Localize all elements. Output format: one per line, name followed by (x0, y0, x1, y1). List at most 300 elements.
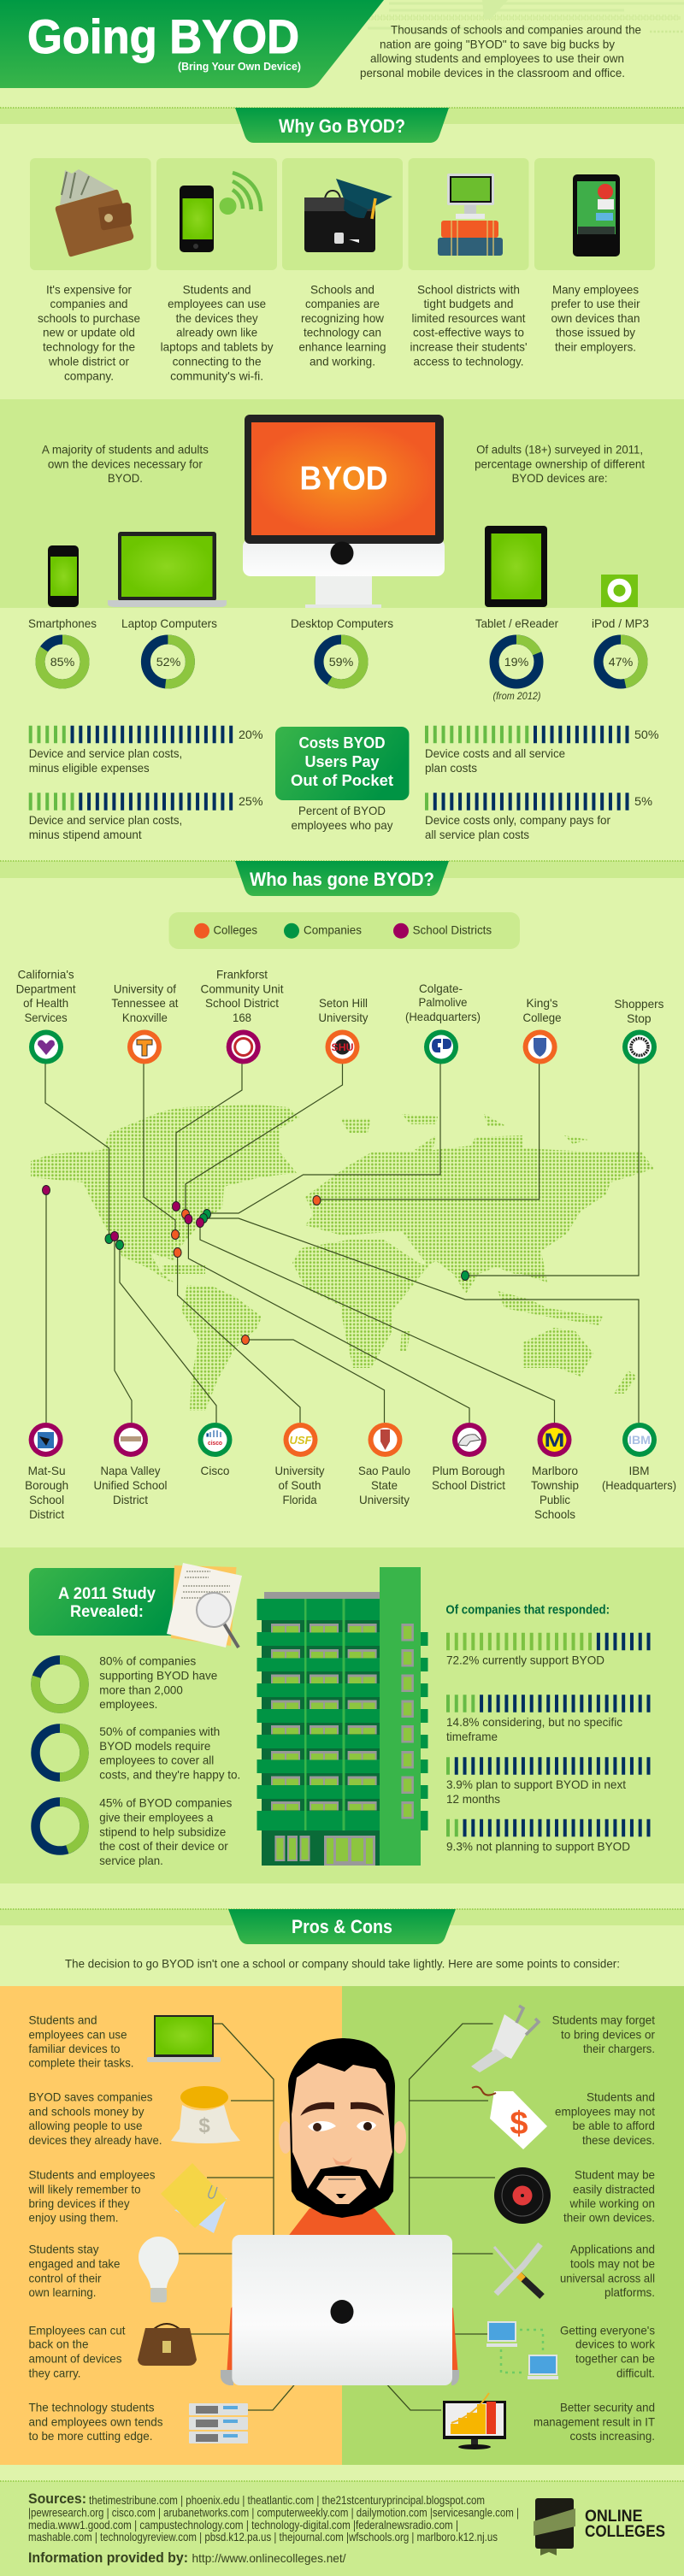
section band: who (0, 861, 684, 878)
icon: tools (494, 2244, 542, 2296)
top org: Tennessee: Knoxville (122, 1011, 168, 1024)
device labels (28, 616, 649, 630)
why text: devices: connecting to the (173, 354, 262, 368)
icon: chart monitor (443, 2393, 506, 2449)
callout: out of pocket: employees who pay (291, 818, 393, 832)
device text right: BYOD devices are: (512, 471, 608, 485)
donut chart: 50% (36, 1729, 84, 1777)
bar: 14.8%: 14.8% considering, but no specific (446, 1715, 622, 1729)
icon: sticky notes (161, 2163, 227, 2233)
why text: budgets: School districts with (417, 282, 520, 296)
study text: 45%: stipend to help subsidize (99, 1824, 227, 1838)
bottom org: Marlboro: Marlboro (532, 1464, 578, 1477)
header decoration (368, 0, 684, 32)
panel: cons (342, 1986, 684, 2465)
callout: out of pocket: Percent of BYOD (298, 804, 386, 817)
pro text 2: allowing people to use (29, 2119, 143, 2132)
heading: Why Go BYOD: Why Go BYOD? (279, 115, 405, 137)
bottom org: Mat-Su: Mat-Su (28, 1464, 66, 1477)
top org: Seton Hill (318, 996, 368, 1064)
companies heading: Of companies that responded: (445, 1603, 610, 1618)
why text: budgets: cost-effective ways to (413, 326, 524, 339)
pro text 2: and schools money by (29, 2104, 144, 2118)
pro text 4 (29, 2243, 121, 2299)
callout: out of pocket (275, 727, 409, 832)
con text 1: Students may forget (552, 2013, 655, 2026)
pro text 2 (29, 2090, 162, 2147)
heading: Pros and Cons (228, 1909, 456, 1944)
top org: California (16, 967, 76, 1064)
pro text 4: control of their (29, 2271, 102, 2284)
con text 2: employees may not (555, 2104, 655, 2118)
map pins (43, 1185, 469, 1344)
bottom org: Napa Valley: District (113, 1493, 148, 1506)
study text: 80%: more than 2,000 (99, 1683, 183, 1696)
top org: King's (523, 996, 562, 1064)
why text: learning: Schools and (310, 282, 374, 296)
donut chart: 45% (36, 1802, 84, 1850)
bottom org: IBM: IBM (629, 1464, 650, 1477)
connector lines: pros cons (179, 2024, 495, 2410)
bottom org: Cisco: cisco (208, 1441, 222, 1447)
pro text 1: Students and (29, 2013, 97, 2026)
footer band (0, 2481, 684, 2576)
device text left: BYOD. (108, 471, 143, 485)
bottom org: Mat-Su: School (29, 1493, 64, 1506)
top org: California: California's (18, 967, 74, 981)
bar: 20%: Device and service plan costs, (29, 746, 182, 760)
study text: 50%: 50% of companies with (99, 1724, 220, 1738)
why text: devices: community's wi-fi. (170, 368, 263, 382)
bar: 50%: Device costs and all service (425, 746, 565, 760)
information provided (28, 2549, 346, 2566)
con text 2: Students and (587, 2090, 655, 2103)
why text: employees: those issued by (556, 326, 635, 339)
pro text 1: complete their tasks. (29, 2056, 133, 2070)
desktop monitor: BYOD (299, 461, 388, 498)
why text: employees: prefer to use their (551, 297, 640, 310)
con text 2: be able to afford (573, 2119, 655, 2132)
why text: employees: their employers. (555, 340, 636, 354)
icon: smartphone (573, 174, 620, 256)
bar: 25% (29, 794, 262, 841)
why text: devices: laptops and tablets by (161, 340, 274, 354)
why text: budgets: tight budgets and (424, 297, 513, 310)
donut chart: 19%: (from 2012) (492, 690, 540, 702)
study text: 80%: supporting BYOD have (99, 1669, 217, 1683)
icon: brown briefcase (138, 2324, 197, 2366)
bottom org: Marlboro: M (544, 1429, 564, 1451)
con text 6: Better security and (560, 2400, 655, 2414)
top org: Colgate: (Headquarters) (405, 1010, 481, 1023)
pro text 6: The technology students (29, 2400, 154, 2414)
device: smartphone (48, 545, 79, 607)
why text: employees (551, 282, 640, 354)
con text 6: costs increasing. (569, 2429, 655, 2443)
con text 6 (534, 2400, 655, 2443)
con text 6: management result in IT (534, 2414, 655, 2428)
donut chart: 19%: 19% (504, 655, 528, 669)
bottom org: IBM: (Headquarters) (602, 1478, 676, 1492)
bottom org: Marlboro (531, 1423, 579, 1521)
person illustration (227, 2038, 458, 2377)
top org: Colgate (405, 981, 481, 1064)
con text 5 (560, 2323, 656, 2379)
pro text 1: familiar devices to (29, 2042, 121, 2055)
con text 5: together can be (575, 2352, 655, 2366)
con text 3: while working on (569, 2196, 655, 2210)
bar: 14.8% (446, 1703, 651, 1743)
pro text 3: Students and employees (29, 2167, 156, 2181)
bottom org: Sao Paulo: Sao Paulo (358, 1464, 410, 1477)
why text: budgets (410, 282, 527, 368)
section band: pros (0, 1909, 684, 1925)
bottom org: Plum Borough (432, 1423, 505, 1492)
callout: 2011 study: Revealed: (70, 1603, 144, 1621)
icon: servers (189, 2403, 248, 2443)
icon: wallet (56, 169, 133, 256)
con text 4: platforms. (604, 2285, 655, 2299)
con text 5: difficult. (616, 2366, 655, 2379)
icon: money bag: $ (198, 2114, 210, 2137)
intro text: nation are going "BYOD" to save big bucks by (380, 37, 615, 50)
callout: 2011 study (29, 1568, 192, 1636)
con text 2 (555, 2090, 655, 2147)
icon: money bag (171, 2086, 240, 2143)
top org: California: Department (16, 981, 76, 995)
bottom org: Marlboro: Schools (534, 1507, 575, 1521)
why text: learning: recognizing how (301, 311, 385, 325)
bottom org: IBM: IBM (628, 1433, 651, 1447)
pro text 6: to be more cutting edge. (29, 2429, 152, 2443)
laptop back (221, 2235, 459, 2385)
why text: expensive (38, 282, 140, 382)
bottom org: Mat-Su: Borough (25, 1478, 68, 1492)
bottom org: USF: University (275, 1464, 325, 1477)
pro text 5: back on the (29, 2337, 89, 2351)
pro text 4: Students stay (29, 2243, 99, 2256)
information provided: Information provided by: (28, 2549, 188, 2566)
top org: Shoppers Stop (614, 997, 663, 1064)
bar: 25%: Device and service plan costs, (29, 813, 182, 827)
con text 5: devices to work (575, 2337, 656, 2351)
bar: 20% (29, 728, 262, 775)
top org: Frankforst: School District (205, 996, 279, 1010)
bottom org: Marlboro: Township (531, 1478, 579, 1492)
bottom org: USF: Florida (282, 1493, 317, 1506)
why text: employees: own devices than (551, 311, 640, 325)
why text: budgets: increase their students' (410, 340, 527, 354)
study text: 50%: costs, and they're happy to. (99, 1768, 240, 1782)
bottom org: Marlboro: Public (540, 1493, 570, 1506)
bar: 14.8%: timeframe (446, 1730, 498, 1743)
device text left (42, 443, 209, 485)
bottom org: Sao Paulo (358, 1423, 410, 1506)
pro text 3: enjoy using them. (29, 2211, 118, 2225)
study text: 45% (99, 1796, 232, 1867)
con text 1 (552, 2013, 655, 2055)
legend: Colleges (214, 923, 257, 937)
why text: budgets: limited resources want (412, 311, 526, 325)
sources (28, 2491, 519, 2544)
why text: budgets: access to technology. (414, 354, 523, 368)
study text: 50%: employees to cover all (99, 1754, 214, 1767)
donut chart: 47%: 47% (609, 655, 633, 669)
header banner (0, 0, 384, 88)
devices band (0, 399, 684, 608)
donut chart: 80% (36, 1660, 84, 1708)
bottom org: Napa Valley (94, 1423, 168, 1506)
bottom org: Plum Borough: Plum Borough (433, 1464, 504, 1477)
device labels: iPod / MP3 (592, 616, 649, 630)
bar: 20%: 20% (239, 728, 263, 741)
device labels: Smartphones (28, 616, 97, 630)
top org: California: Services (25, 1011, 68, 1024)
icon: phone with wifi (180, 173, 261, 252)
bar: 20%: minus eligible expenses (29, 761, 150, 775)
connector lines (45, 1064, 639, 1423)
con text 3: easily distracted (573, 2182, 655, 2196)
device labels: Laptop Computers (121, 616, 217, 630)
icon: light bulb (139, 2237, 179, 2302)
sources: thetimestribune.com | phoenix.edu | theatlantic.com | the21stcenturyprincipal.blogspot.com (89, 2493, 485, 2507)
device labels: Desktop Computers (291, 616, 393, 630)
study text: 50% (99, 1724, 240, 1782)
top org: Seton Hill: SHU (332, 1041, 354, 1053)
study text: 45%: give their employees a (99, 1811, 214, 1824)
bottom org: Cisco (198, 1423, 233, 1477)
top org: Frankforst (200, 967, 284, 1064)
bottom org: USF (275, 1423, 325, 1506)
why text: expensive: schools to purchase (38, 311, 140, 325)
top org: Frankforst: Community Unit (200, 981, 284, 995)
why text: expensive: new or update old (43, 326, 135, 339)
why text: expensive: company. (64, 368, 114, 382)
bar: 50% (425, 728, 658, 775)
bottom org: Mat-Su: District (29, 1507, 64, 1521)
main title: Going BYOD (27, 9, 299, 63)
con text 5: Getting everyone's (560, 2323, 655, 2337)
sources: mashable.com | technologyreview.com | pbsd.k12.pa.us | thejournal.com |wfschools.org | marlboro.k12.nj.us (28, 2530, 498, 2544)
device text left: A majority of students and adults (42, 443, 209, 457)
donut chart: 52%: 52% (156, 655, 180, 669)
pro text 5: they carry. (29, 2366, 80, 2379)
bottom org: Cisco: Cisco (200, 1464, 230, 1477)
icon: computer on books (438, 174, 503, 256)
callout: out of pocket: Out of Pocket (291, 772, 393, 789)
pro text 3 (28, 2167, 156, 2225)
top org: King's: King's (527, 996, 557, 1010)
callout: 2011 study: A 2011 Study (58, 1585, 156, 1603)
bar: 5%: 5% (634, 794, 652, 808)
bar: 50%: 50% (634, 728, 658, 741)
why text: expensive: It's expensive for (46, 282, 132, 296)
heading: Why Go BYOD (235, 108, 449, 143)
con text 4: tools may not be (570, 2257, 655, 2271)
top org: Frankforst: Frankforst (216, 967, 268, 981)
con text 1: to bring devices or (561, 2027, 655, 2041)
intro text (360, 22, 641, 80)
why text: devices: the devices they (176, 311, 258, 325)
bottom org: Sao Paulo: University (359, 1493, 410, 1506)
bottom org: USF: USF (289, 1434, 313, 1447)
bottom org: Napa Valley: Unified School (94, 1478, 168, 1492)
donut chart: 85% (40, 640, 85, 684)
information provided: http://www.onlinecolleges.net/ (192, 2551, 346, 2565)
pro text 1 (29, 2013, 133, 2070)
heading: Pros and Cons: Pros & Cons (292, 1916, 392, 1937)
why text: employees: Many employees (552, 282, 639, 296)
top org: Shoppers Stop: Shoppers (614, 997, 663, 1011)
pro text 5 (29, 2323, 126, 2379)
top org: Colgate: Colgate- (419, 981, 463, 995)
legend: Companies (304, 923, 362, 937)
con text 3: their own devices. (563, 2211, 655, 2225)
why text: learning: and working. (310, 354, 375, 368)
callout: out of pocket: Users Pay (304, 753, 380, 770)
pro text 4: engaged and take (29, 2257, 121, 2271)
subtitle: (Bring Your Own Device) (178, 60, 301, 73)
top org: Seton Hill: Seton Hill (319, 996, 368, 1010)
donut chart: 47% (598, 640, 643, 684)
device text right: percentage ownership of different (475, 457, 645, 470)
pro text 2: devices they already have. (29, 2133, 162, 2147)
device text right: Of adults (18+) surveyed in 2011, (476, 443, 643, 457)
why text: expensive: companies and (50, 297, 128, 310)
bar: 50%: plan costs (425, 761, 477, 775)
top org: Colgate: Palmolive (419, 995, 468, 1009)
donut chart: 52% (145, 640, 190, 684)
study text: 80%: employees. (99, 1697, 157, 1711)
bottom org: USF: of South (279, 1478, 321, 1492)
panel: pros (0, 1986, 342, 2465)
callout: out of pocket: Costs BYOD (299, 734, 386, 752)
pro text 2: BYOD saves companies (29, 2090, 152, 2103)
desktop monitor (243, 415, 445, 608)
pro text 1: employees can use (29, 2027, 127, 2041)
pro text 6: and employees own tends (29, 2414, 162, 2428)
bar: 25%: minus stipend amount (29, 828, 142, 841)
bar: 9.3%: 9.3% not planning to support BYOD (446, 1840, 630, 1854)
con text 4 (560, 2243, 655, 2299)
icon: plug (471, 2006, 539, 2072)
study text: 45%: service plan. (99, 1854, 163, 1867)
pros intro: The decision to go BYOD isn't one a school or company should take lightly. Here are some points to consider: (65, 1957, 620, 1971)
con text 4: Applications and (570, 2243, 655, 2256)
top org: Shoppers Stop: Stop (627, 1011, 652, 1025)
why text: devices (161, 282, 274, 382)
bottom org: Sao Paulo: State (371, 1478, 398, 1492)
world map dots (31, 1105, 654, 1411)
top org: King's: College (523, 1011, 562, 1024)
why text: learning (299, 282, 386, 368)
bar: 5% (425, 794, 652, 841)
top org: California: of Health (23, 996, 68, 1010)
study text: 80%: 80% of companies (99, 1654, 196, 1668)
icon: networked computers (486, 2321, 558, 2379)
pro text 5: Employees can cut (29, 2323, 126, 2337)
heading: Who has gone BYOD: Who has gone BYOD? (250, 869, 434, 890)
sources: |pewresearch.org | cisco.com | arubanetworks.com | computerweekly.com | dailymotion.com |servicesangle.com | (28, 2506, 519, 2520)
icon: price tag: $ (510, 2106, 528, 2142)
study band (0, 1547, 684, 1883)
bottom org: IBM (602, 1423, 676, 1492)
bar: 5%: Device costs only, company pays for (425, 813, 610, 827)
logo: online colleges: COLLEGES (585, 2523, 665, 2541)
intro text: personal mobile devices in the classroom and office. (360, 66, 625, 80)
donut chart: 19% (492, 640, 540, 702)
heading: Who has gone BYOD (235, 861, 449, 896)
bar: 3.9%: 12 months (446, 1792, 500, 1806)
icon: price tag (472, 2087, 547, 2149)
top org: Tennessee (111, 981, 178, 1064)
sources: Sources: (28, 2491, 86, 2507)
section band: why (0, 108, 684, 124)
con text 1: their chargers. (583, 2042, 655, 2055)
bar: 3.9%: 3.9% plan to support BYOD in next (446, 1777, 626, 1791)
icon: briefcase and cap (304, 179, 392, 252)
con text 2: these devices. (582, 2133, 655, 2147)
donut chart: 85%: 85% (50, 655, 74, 669)
device text right (475, 443, 645, 485)
why text: learning: enhance learning (299, 340, 386, 354)
top org: Tennessee: Tennessee at (111, 996, 178, 1010)
bar: 5%: all service plan costs (425, 828, 529, 841)
pro text 3: bring devices if they (29, 2196, 130, 2210)
con text 3: Student may be (575, 2167, 655, 2181)
bar: 72.2%: 72.2% currently support BYOD (446, 1653, 604, 1667)
study text: 45%: the cost of their device or (99, 1839, 228, 1853)
logo: online colleges: ONLINE (585, 2508, 643, 2526)
device labels: Tablet / eReader (475, 616, 558, 630)
intro text: allowing students and employees to use their own (370, 51, 624, 65)
why text: expensive: whole district or (48, 354, 129, 368)
legend: School Districts (413, 923, 492, 937)
top org: Seton Hill: University (318, 1011, 368, 1024)
why text: devices: already own like (176, 326, 257, 339)
why text: learning: technology can (304, 326, 381, 339)
building illustration (256, 1567, 428, 1866)
pro text 6 (29, 2400, 162, 2443)
bottom org: Napa Valley: Napa Valley (101, 1464, 161, 1477)
why text: devices: Students and (183, 282, 251, 296)
bar: 3.9% (446, 1766, 651, 1806)
sources: media.www1.good.com | campustechnology.com | technology-digital.com |federalnewsradio.com | (28, 2518, 458, 2532)
icon: laptop (147, 2015, 221, 2062)
bottom org: Plum Borough: School District (432, 1478, 505, 1492)
legend (169, 912, 520, 949)
device: tablet (485, 526, 547, 607)
pro text 4: own learning. (29, 2285, 96, 2299)
pro text 3: will likely remember to (28, 2182, 141, 2196)
panel: why cards (30, 158, 655, 270)
bar: 25%: 25% (239, 794, 263, 808)
icon: paper and magnifier (167, 1563, 242, 1648)
pro text 5: amount of devices (29, 2352, 121, 2366)
why text: expensive: technology for the (43, 340, 135, 354)
why text: learning: companies are (305, 297, 380, 310)
intro text: Thousands of schools and companies around the (391, 22, 641, 36)
logo: online colleges (534, 2498, 665, 2555)
donut chart: 59% (319, 640, 363, 684)
bottom org: Mat-Su (25, 1423, 68, 1521)
donut chart: 59%: 59% (329, 655, 353, 669)
why text: devices: employees can use (168, 297, 266, 310)
con text 3 (563, 2167, 655, 2225)
study text: 80% (99, 1654, 217, 1711)
device text left: own the devices necessary for (48, 457, 203, 470)
top org: Tennessee: University of (114, 981, 176, 995)
